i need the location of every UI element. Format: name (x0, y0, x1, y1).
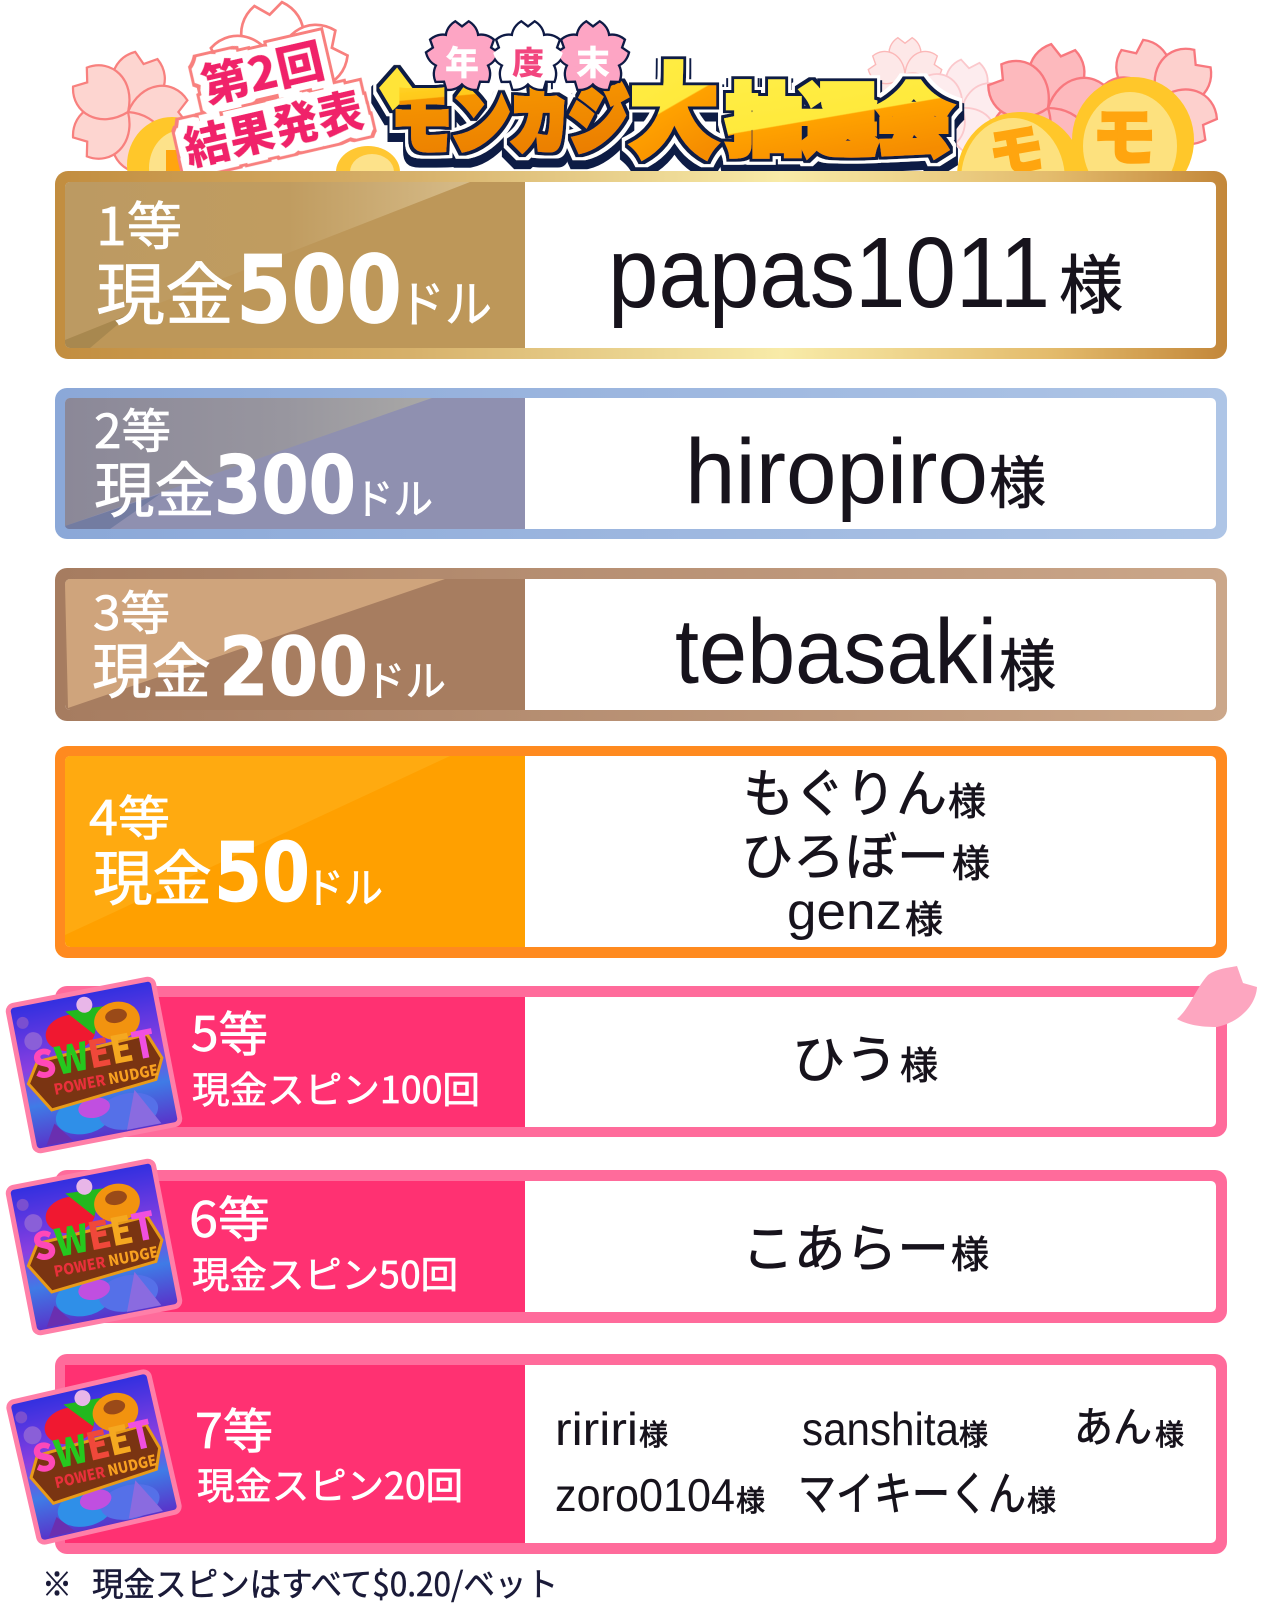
logo: モンカジ大抽選会: 大 (630, 32, 718, 177)
winner: こあらー (742, 1207, 949, 1282)
prize block: 7等 (195, 1392, 273, 1462)
icon: cherry petal (1177, 966, 1257, 1027)
prize block: 3等 (93, 575, 170, 644)
prize block (65, 995, 525, 1127)
prize block: 1等 (96, 185, 182, 260)
panel frame (55, 568, 1227, 721)
winner: papas1011 (608, 217, 1050, 329)
logo blossoms: 年度末: 末 (576, 36, 610, 85)
prize block: 2等 (94, 393, 171, 462)
winner: 様 (999, 621, 1056, 703)
gold coins (127, 77, 1194, 242)
panel: 5等 (7, 966, 1257, 1152)
prize block (65, 756, 525, 947)
icon: game tile Sweet Powernudge (7, 978, 181, 1152)
logo: モンカジ大抽選会: 抽選会 (727, 60, 951, 170)
prize block (65, 575, 525, 715)
prize block: 500 (236, 236, 402, 345)
header banner (47, 0, 1245, 242)
panel: 1等 (55, 171, 1227, 359)
winner: ひう (792, 1018, 898, 1093)
winner: 様 (989, 438, 1046, 520)
winners: ひろぼー (741, 815, 949, 890)
winners: 様 (736, 1478, 765, 1520)
winners: 様 (959, 1412, 988, 1454)
badge: 第2回 結果発表: 結果発表 (177, 74, 369, 179)
logo: モンカジ大抽選会: モンカジ (392, 61, 628, 168)
icon: game tile Sweet Powernudge: SWEET (27, 1195, 159, 1272)
winner: hiropiro (685, 421, 988, 523)
icon: game tile Sweet Powernudge (8, 1371, 180, 1543)
logo blossoms: 年度末: 度 (512, 38, 544, 84)
icon: game tile Sweet Powernudge: POWER NUDGE (52, 1241, 160, 1282)
logo: モンカジ大抽選会 (381, 32, 951, 177)
prize block: 現金スピン50回 (192, 1245, 458, 1299)
footnote: ※ (42, 1558, 72, 1606)
gold coins: モ (1092, 87, 1156, 179)
prize block: ドル (365, 648, 446, 709)
logo blossoms: 年度末: 年 (445, 36, 479, 85)
icon: game tile Sweet Powernudge: SWEET (26, 1403, 158, 1484)
winners: genz (787, 883, 902, 941)
winners: 様 (948, 771, 986, 826)
panel frame (55, 986, 1227, 1137)
prize block (65, 182, 525, 348)
winners: 様 (639, 1412, 668, 1454)
winners (741, 752, 990, 944)
panel: 6等 (7, 1160, 1227, 1334)
panel: 4等 (55, 746, 1227, 958)
icon: game tile Sweet Powernudge: POWER NUDGE (52, 1449, 159, 1493)
prize block: 300 (214, 439, 356, 532)
prize block: ドル (398, 265, 492, 337)
prize block: 現金 (93, 831, 212, 918)
prize block: 現金スピン100回 (192, 1060, 480, 1114)
icon: game tile Sweet Powernudge (7, 1160, 181, 1334)
winners: 様 (1027, 1478, 1056, 1520)
winner: tebasaki (675, 601, 997, 703)
winners: zoro0104 (555, 1469, 735, 1521)
panel: 3等 (55, 568, 1227, 721)
prize block (65, 393, 525, 532)
prize block: 4等 (89, 779, 170, 849)
prize block: ドル (305, 855, 383, 916)
prize block: 200 (219, 621, 368, 715)
logo blossoms: 年度末 (425, 23, 630, 94)
winners: sanshita (802, 1403, 959, 1455)
badge: 第2回 結果発表: 第2回 (194, 25, 330, 117)
cherry blossoms: right (866, 17, 1245, 189)
panel frame (55, 388, 1227, 539)
winners (555, 1394, 1184, 1524)
panel frame (55, 171, 1227, 359)
winners: 様 (1155, 1412, 1184, 1454)
panel frame (55, 1354, 1227, 1554)
icon: game tile Sweet Powernudge: SWEET (27, 1013, 159, 1090)
gold coins: モ (982, 103, 1049, 190)
badge: 第2回 結果発表 (164, 19, 369, 179)
winners: マイキーくん (798, 1458, 1026, 1524)
winners: ririri (555, 1403, 638, 1455)
prize block: 現金 (94, 443, 215, 530)
winners: もぐりん (743, 752, 947, 827)
prize block: 現金スピン20回 (197, 1456, 463, 1510)
prize block: 現金 (96, 240, 234, 339)
prize block: ドル (354, 466, 433, 527)
prize block (65, 1365, 525, 1543)
panel: 7等 (8, 1354, 1227, 1554)
prize block: 5等 (191, 995, 268, 1065)
prize block: 現金 (92, 624, 211, 711)
prize block (65, 1181, 525, 1312)
winners: あん (1074, 1394, 1152, 1455)
panel frame (55, 1170, 1227, 1323)
icon: game tile Sweet Powernudge: POWER NUDGE (52, 1059, 160, 1100)
winners: 様 (905, 889, 943, 944)
cherry blossoms: left (47, 0, 365, 192)
winner: 様 (900, 1035, 938, 1090)
panel frame (55, 746, 1227, 958)
prize block: 50 (214, 826, 310, 921)
winner: 様 (1059, 235, 1123, 327)
winners: 様 (952, 833, 990, 888)
winner: 様 (951, 1224, 989, 1279)
footnote: 現金スピンはすべて$0.20/ベット (92, 1558, 558, 1606)
prize block: 6等 (189, 1181, 270, 1252)
panel: 2等 (55, 388, 1227, 539)
